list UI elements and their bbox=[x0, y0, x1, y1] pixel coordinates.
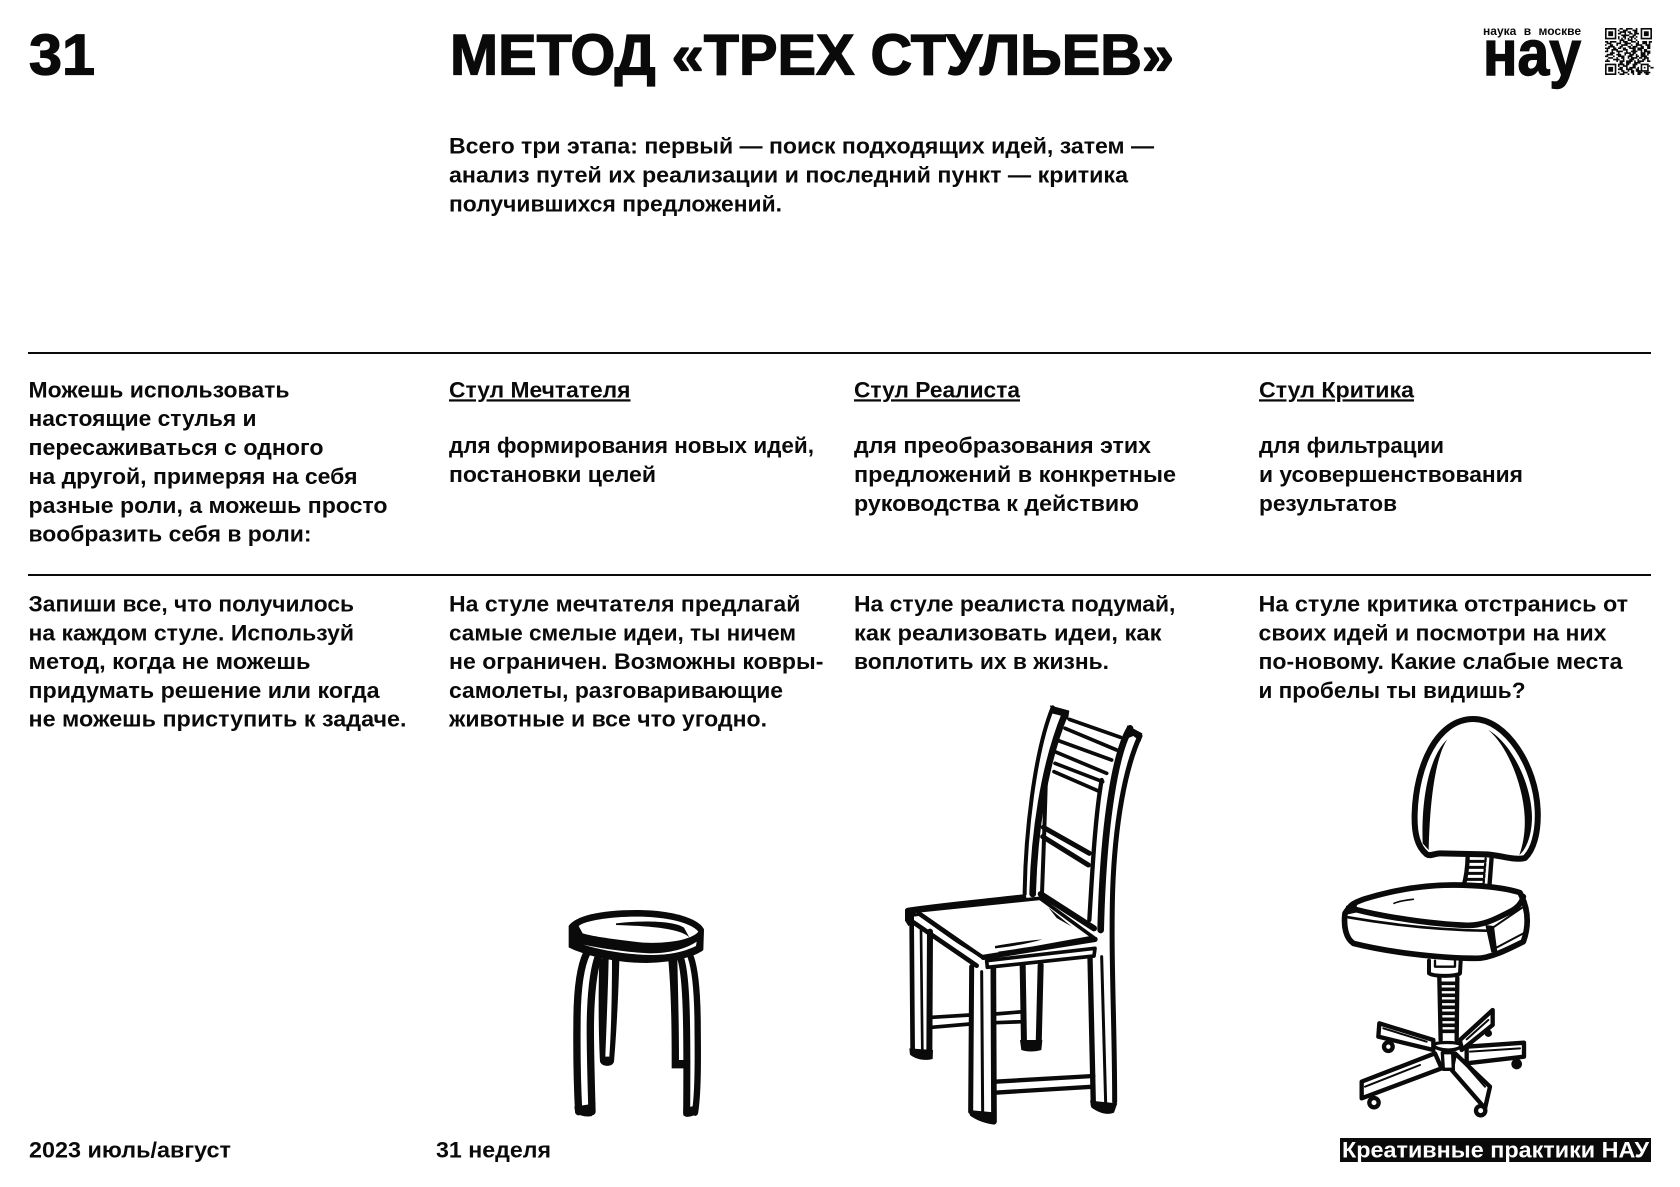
intro text: получившихся предложений. bbox=[449, 191, 782, 216]
front leg bbox=[971, 967, 972, 1112]
intro text: анализ путей их реализации и последний пункт — критика bbox=[449, 162, 1128, 187]
dreamer text: самолеты, разговаривающие bbox=[449, 678, 783, 703]
usage text: Запиши все, что получилось bbox=[28, 592, 354, 616]
heading: realist chair: руководства к действию bbox=[854, 491, 1139, 516]
heading: realist chair: предложений в конкретные bbox=[854, 462, 1176, 487]
critic text: по-новому. Какие слабые места bbox=[1258, 649, 1623, 674]
footer label: Креативные практики НАУ bbox=[1342, 1138, 1650, 1163]
footer date: 2023 июль/август bbox=[29, 1138, 231, 1163]
intro column: вообразить себя в роли: bbox=[28, 521, 312, 546]
seat bbox=[1345, 885, 1527, 958]
heading: critic chair: результатов bbox=[1259, 491, 1397, 516]
heading: critic chair: для фильтрации bbox=[1259, 433, 1444, 458]
intro column bbox=[28, 377, 388, 546]
title: МЕТОД «ТРЕХ СТУЛЬЕВ» bbox=[450, 24, 1174, 88]
logo: НАУ: нау bbox=[1483, 17, 1581, 89]
realist text: как реализовать идеи, как bbox=[854, 620, 1162, 645]
usage text: придумать решение или когда bbox=[28, 678, 380, 703]
neck bbox=[1463, 857, 1492, 887]
stretchers bbox=[932, 1012, 1023, 1027]
dreamer text: не ограничен. Возможны ковры- bbox=[449, 649, 823, 674]
heading: dreamer chair: Стул Мечтателя bbox=[449, 377, 630, 402]
intro column: настоящие стулья и bbox=[28, 406, 256, 431]
usage text: на каждом стуле. Используй bbox=[28, 620, 354, 645]
back legs behind seat bbox=[1023, 965, 1024, 1045]
icon: stool bbox=[569, 910, 704, 1117]
left upright bbox=[1025, 707, 1053, 894]
icon: wooden chair bbox=[905, 705, 1142, 1125]
realist text: воплотить их в жизнь. bbox=[854, 649, 1109, 674]
usage text: не можешь приступить к задаче. bbox=[28, 706, 406, 732]
usage text: метод, когда не можешь bbox=[28, 649, 310, 674]
intro column: Можешь использовать bbox=[28, 377, 290, 402]
dreamer text: На стуле мечтателя предлагай bbox=[449, 592, 800, 616]
base legs bbox=[1378, 1023, 1433, 1050]
page number: 31 bbox=[29, 24, 95, 88]
back bbox=[1415, 719, 1538, 859]
column bbox=[1429, 961, 1461, 976]
heading: realist chair bbox=[854, 377, 1176, 516]
slats bbox=[1054, 719, 1121, 792]
icon: office chair bbox=[1345, 719, 1538, 1115]
logo: НАУ: наука в москве bbox=[1483, 24, 1581, 38]
heading: dreamer chair: для формирования новых идей, bbox=[449, 433, 814, 458]
intro text: Всего три этапа: первый — поиск подходящих идей, затем — bbox=[449, 134, 1155, 158]
heading: dreamer chair: постановки целей bbox=[449, 462, 656, 487]
critic text bbox=[1258, 592, 1628, 703]
QR code bbox=[1605, 28, 1654, 75]
critic text: своих идей и посмотри на них bbox=[1258, 620, 1607, 645]
heading: critic chair: Стул Критика bbox=[1259, 377, 1414, 402]
right upright bbox=[1112, 736, 1140, 1102]
heading: critic chair bbox=[1259, 377, 1523, 516]
footer week: 31 неделя bbox=[436, 1138, 551, 1163]
realist text bbox=[854, 592, 1175, 674]
intro text bbox=[449, 134, 1155, 216]
dreamer text: самые смелые идеи, ты ничем bbox=[449, 620, 796, 645]
heading: realist chair: Стул Реалиста bbox=[854, 377, 1020, 402]
casters bbox=[1384, 1042, 1393, 1051]
intro column: на другой, примеряя на себя bbox=[28, 464, 358, 489]
critic text: На стуле критика отстранись от bbox=[1258, 592, 1628, 616]
dreamer text bbox=[448, 592, 823, 732]
seat bbox=[910, 898, 1093, 957]
heading: critic chair: и усовершенствования bbox=[1259, 462, 1523, 487]
dreamer text: животные и все что угодно. bbox=[448, 706, 767, 732]
heading: realist chair: для преобразования этих bbox=[854, 433, 1151, 458]
critic text: и пробелы ты видишь? bbox=[1258, 678, 1526, 703]
heading: dreamer chair bbox=[449, 377, 814, 487]
realist text: На стуле реалиста подумай, bbox=[854, 592, 1175, 616]
intro column: пересаживаться с одного bbox=[28, 435, 324, 460]
usage text bbox=[28, 592, 406, 732]
intro column: разные роли, а можешь просто bbox=[28, 493, 388, 518]
